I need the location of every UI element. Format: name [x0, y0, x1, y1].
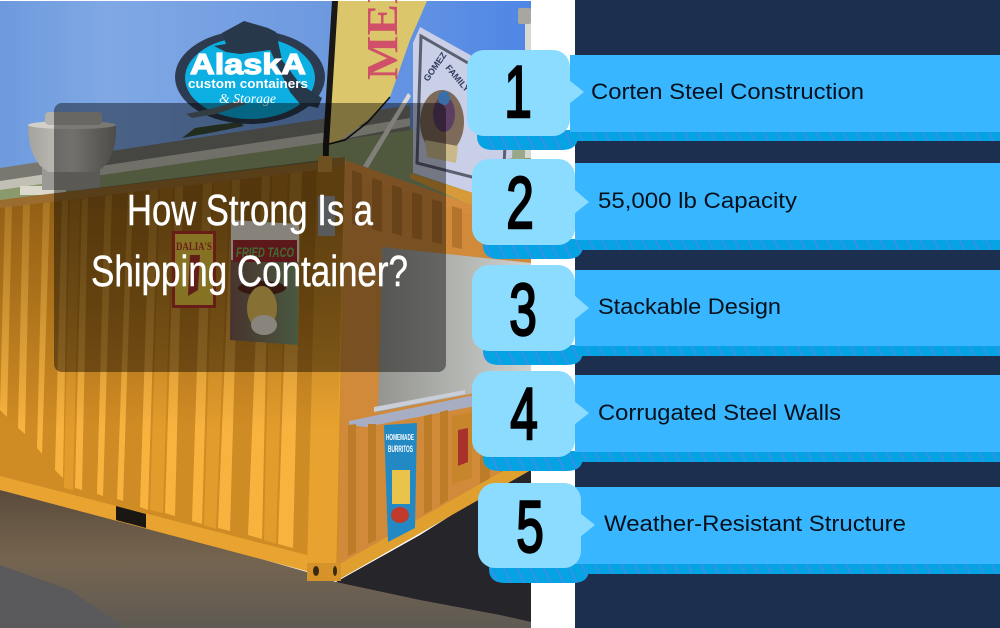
sign board: GOMEZ: [421, 50, 449, 83]
logo wordmark: & Storage: [219, 92, 276, 107]
building roof: [0, 105, 410, 188]
label: Stackable Design: [598, 294, 781, 319]
conduit box: [318, 196, 335, 236]
ground shadow: [336, 465, 531, 622]
corner knob: [318, 156, 332, 172]
title: Shipping Container?: [91, 247, 408, 296]
title: [91, 186, 408, 296]
number: 1: [504, 52, 532, 133]
number: 5: [516, 487, 544, 568]
band shadow: [581, 563, 1000, 574]
front corrugation highlights: [0, 171, 302, 548]
top shadow shading: [0, 157, 345, 430]
serving window: [378, 247, 531, 412]
window frame: [374, 390, 465, 412]
band shadow: [575, 345, 1000, 356]
number: 2: [506, 163, 534, 244]
trees behind roof: [182, 122, 244, 138]
sign board: FAMILY: [443, 63, 472, 94]
photo: food container truck: [0, 0, 531, 628]
label: Corten Steel Construction: [591, 79, 864, 104]
item 1: Corten Steel Construction: [467, 50, 1000, 150]
sky: [0, 1, 531, 241]
pointer: [574, 189, 589, 214]
logo wordmark: AlaskA: [190, 49, 306, 81]
ground: [0, 490, 531, 628]
pointer: [580, 513, 595, 537]
under shadow: [483, 345, 583, 365]
rooftop vent: [20, 112, 116, 195]
number box: [467, 50, 570, 136]
aleutian chain: [186, 100, 246, 118]
poster: Dalia's: [172, 231, 216, 308]
label: 55,000 lb Capacity: [598, 188, 797, 213]
poster: fried taco: [230, 220, 299, 345]
logo ring: [175, 30, 325, 124]
sign strut: [363, 93, 411, 168]
sign board: [413, 27, 515, 193]
dark title overlay: [54, 103, 446, 372]
side upper corrugation: [352, 170, 462, 249]
container corner post: [307, 160, 345, 581]
item 2: 55,000 lb Capacity: [472, 159, 1000, 259]
number box: [472, 265, 575, 351]
item 3: Stackable Design: [472, 265, 1000, 365]
navy panel: [575, 0, 1000, 628]
logo: [175, 21, 325, 124]
green wall strip by sign: [505, 150, 525, 160]
poster: burritos: HOMEMADE: [386, 433, 414, 442]
band shadow: [575, 239, 1000, 250]
vent cap: [28, 125, 116, 172]
poster: small red: [452, 412, 472, 484]
underside of sign: [410, 173, 531, 235]
poster: fried taco: FRIED TACO: [236, 244, 294, 260]
under shadow: [483, 239, 583, 259]
band: [575, 487, 1000, 564]
vent stem: [42, 168, 100, 190]
serving shelf: [349, 385, 531, 427]
band: [575, 163, 1000, 240]
vent base: [20, 186, 66, 195]
logo wordmark: [188, 49, 308, 107]
poster: burritos: BURRITOS: [388, 444, 413, 454]
asphalt: [0, 565, 125, 628]
emblem: [420, 90, 464, 154]
poster: Dalia's: DALIA'S: [176, 239, 212, 253]
logo wordmark: custom containers: [188, 76, 308, 91]
under shadow: [483, 451, 583, 471]
corner casting: [307, 563, 341, 581]
side lower corrugation: [348, 393, 510, 556]
building wall: [0, 128, 531, 250]
container side face: [336, 157, 531, 581]
side upper rail: [336, 157, 531, 236]
number: 4: [510, 374, 538, 455]
number: 3: [509, 270, 537, 351]
poster: burritos: [384, 423, 417, 542]
number box: [472, 371, 575, 457]
title: How Strong Is a: [127, 186, 373, 235]
logo cyan fill: [185, 37, 315, 119]
pointer: [574, 295, 589, 320]
vent top: [45, 112, 102, 125]
item 4: Corrugated Steel Walls: [472, 371, 1000, 471]
under shadow: [477, 130, 578, 150]
label: Weather-Resistant Structure: [604, 511, 906, 536]
pointer: [569, 80, 584, 104]
forklift pocket: [116, 506, 146, 528]
item 5: Weather-Resistant Structure: [478, 483, 1000, 583]
front top rail: [0, 157, 346, 208]
label: Corrugated Steel Walls: [598, 400, 841, 425]
band: [575, 270, 1000, 346]
container bottom rail: [0, 476, 310, 572]
vent rim: [28, 121, 116, 129]
band shadow: [575, 451, 1000, 462]
number box: [472, 159, 575, 245]
pointer: [574, 401, 589, 425]
rear pole: [518, 8, 531, 158]
flag: [322, 0, 427, 236]
band shadow: [570, 130, 1000, 141]
under shadow: [489, 563, 589, 583]
band: [575, 375, 1000, 452]
container front face: [0, 158, 345, 581]
side bottom rail: [336, 455, 531, 581]
number box: [478, 483, 581, 568]
front corrugation mid tones: [64, 173, 288, 544]
band: [570, 55, 1000, 132]
alaska silhouette: [214, 21, 322, 108]
roof fascia: [0, 118, 410, 190]
